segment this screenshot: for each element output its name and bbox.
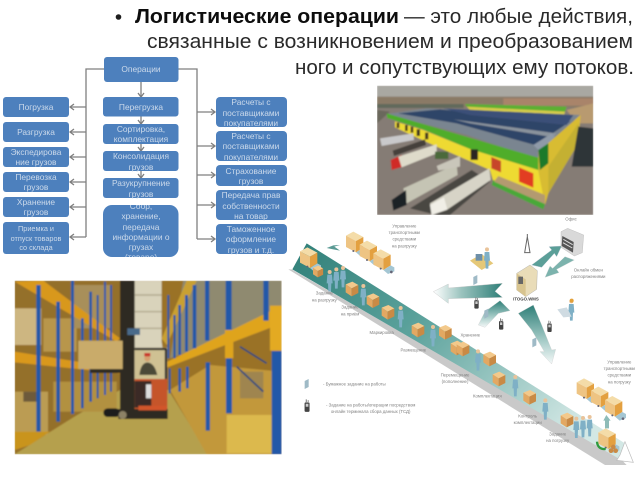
left column boxes: со склада (19, 243, 54, 252)
centre column boxes: Перегрузка (119, 102, 163, 112)
process labels: Управление (607, 359, 632, 364)
photo: warehouse interior with forklift (15, 281, 282, 454)
left column boxes (3, 97, 69, 254)
process labels: на приём (341, 311, 359, 316)
centre column boxes: Консолидация (113, 151, 169, 161)
icon: worker with paper (557, 299, 574, 321)
box: Операции: Операции (121, 64, 161, 74)
left column boxes: Хранение (17, 197, 55, 207)
photo: warehouse exterior with trucks (377, 86, 593, 215)
icon: office server rack (561, 228, 584, 256)
process labels: Задание (341, 305, 359, 310)
conveyor belt (288, 243, 627, 465)
label: online exchange: Онлайн обмен (574, 267, 604, 272)
right column boxes: поставщиками (223, 141, 280, 151)
process labels: Перемещение (441, 372, 470, 377)
right column boxes: грузов (239, 176, 264, 186)
centre column boxes: Разукрупнение (112, 178, 170, 188)
icon: up arrow to trucks (603, 415, 611, 428)
text line 3: ного и сопутствующих ему потоков. (295, 57, 634, 79)
icon: truck on belt (300, 247, 321, 272)
cabin (135, 348, 167, 381)
icon: WMS server (517, 265, 537, 297)
centre column boxes: информации о (112, 232, 170, 242)
arrow: office to server (545, 257, 574, 277)
process labels: на разгрузку (312, 297, 338, 302)
icon: operator at desk (470, 247, 493, 270)
left column boxes: грузов (24, 207, 49, 217)
icon: antenna (525, 234, 530, 253)
process labels: Комплектация (473, 393, 502, 398)
process labels: на погрузку (546, 438, 570, 443)
process labels: комплектации (514, 420, 542, 425)
centre column boxes: грузах (129, 242, 154, 252)
label: office: Офис (565, 217, 578, 222)
label: unloading transport (389, 223, 421, 248)
label: unloading transport: на разгрузку (392, 243, 418, 248)
label: online exchange (571, 267, 606, 279)
left column boxes: грузов (24, 182, 49, 192)
process labels: Хранение (460, 332, 481, 337)
icon: trucks loading (577, 378, 626, 421)
process labels: на погрузку (608, 379, 632, 384)
load on forks (78, 341, 123, 369)
label: ITOGO.WMS: ITOGO.WMS (513, 297, 539, 302)
label: unloading transport: транспортными (389, 230, 421, 235)
left column boxes: Погрузка (19, 102, 54, 112)
right column boxes: на товар (234, 211, 268, 221)
heading: bold term: Логистические операции (135, 6, 399, 28)
icon: paper task (305, 379, 309, 389)
centre column boxes: (товаре) (125, 252, 157, 262)
centre column boxes: грузов (129, 162, 154, 172)
centre column boxes: передача (123, 222, 160, 232)
right column boxes: Страхование (226, 166, 277, 176)
right column boxes: поставщиками (223, 108, 280, 118)
process labels: Маркировка (370, 330, 394, 335)
process labels: Задание (316, 291, 334, 296)
icon: truck loading on belt (598, 428, 619, 453)
icons: paper tasks and terminals (473, 275, 552, 347)
connectors (70, 69, 215, 242)
right column boxes: покупателями (224, 152, 278, 162)
left column boxes: отпуск товаров (11, 234, 62, 243)
right column boxes: Расчеты с (231, 97, 271, 107)
centre column boxes (103, 97, 178, 262)
process labels (312, 291, 636, 443)
floor (15, 390, 208, 454)
process labels: Контроль (518, 413, 538, 418)
arrow: WMS to picking (518, 305, 556, 364)
right racks (160, 280, 184, 414)
left column boxes: Приемка и (18, 224, 54, 233)
left column boxes: Перевозка (15, 172, 57, 182)
centre column boxes: грузов (129, 189, 154, 199)
box: Операции (104, 57, 178, 82)
arrow: WMS to belt (433, 283, 502, 303)
arrow: WMS to storage (478, 301, 510, 327)
right column boxes: Расчеты с (231, 131, 271, 141)
legend: - Бумажное задание на работы (323, 382, 386, 387)
process labels: средствами (608, 373, 632, 378)
right column boxes (216, 97, 287, 255)
icon: green turn arrow (597, 442, 606, 449)
label: unloading transport: Управление (392, 223, 417, 228)
process diagram: warehouse logistics flow (288, 217, 636, 465)
process labels: Размещение (401, 348, 427, 353)
centre column boxes: Сбор, (130, 201, 152, 211)
right column boxes: Таможенное (227, 224, 276, 234)
centre column boxes: комплектация (114, 134, 168, 144)
right column boxes: Передача прав (222, 190, 281, 200)
right column boxes: оформление (226, 234, 276, 244)
left column boxes: Разгрузка (17, 127, 55, 137)
icon: small arrow to belt (327, 245, 340, 251)
title text (116, 6, 634, 79)
legend: онлайн терминала сбора данных (ТСД) (331, 409, 411, 414)
icon: trucks unloading (346, 232, 394, 274)
right column boxes: грузов и т.д. (228, 245, 274, 255)
left column boxes: Экспедирова (11, 147, 62, 157)
driver (144, 355, 150, 361)
right column boxes: собственности (222, 201, 280, 211)
centre column boxes: хранение, (121, 211, 161, 221)
label: online exchange: распоряжениями (571, 274, 606, 279)
process labels: Задание (549, 431, 567, 436)
text line 2: связанные с возникновением и преобразованием (147, 31, 633, 53)
org chart: operations (0, 50, 292, 265)
icon: data terminal (305, 399, 310, 412)
icons: workers and boxes on belt (313, 266, 593, 438)
label: unloading transport: средствами (393, 237, 417, 242)
left column boxes: ние грузов (16, 157, 57, 167)
centre column boxes: Сортировка, (117, 124, 165, 134)
process labels: (пополнение) (442, 379, 469, 384)
text line 1: — это любые действия, (404, 6, 633, 28)
right column boxes: покупателями (224, 118, 278, 128)
process labels: транспортными (604, 366, 636, 371)
forklift mast (120, 281, 135, 409)
arrow: server to office (532, 246, 562, 267)
icon: pile of balls (609, 445, 618, 453)
left racks (15, 281, 120, 452)
centre ceiling (133, 280, 164, 379)
legend: - Задание на работы/операции посредством (326, 402, 415, 407)
bullet (116, 14, 121, 20)
icon: belt end arrow (617, 442, 633, 462)
forklift body (135, 379, 167, 410)
legend (305, 379, 415, 414)
